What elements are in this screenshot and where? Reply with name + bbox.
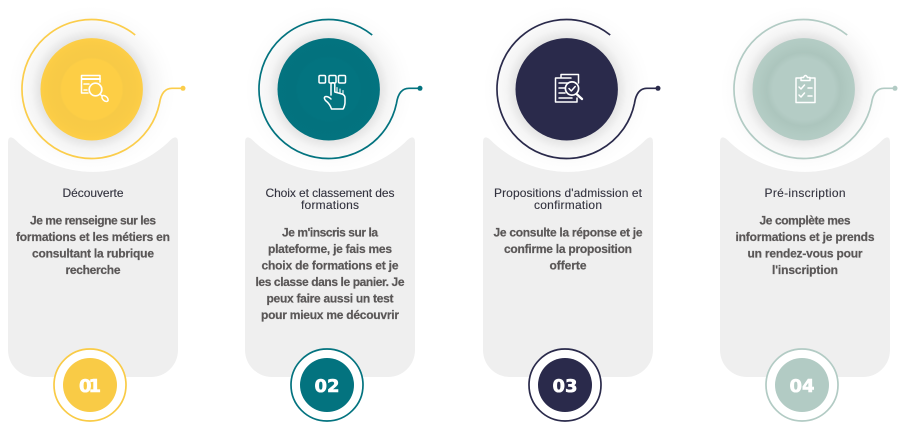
heading: confirmation bbox=[534, 198, 602, 212]
description: informations et je prends bbox=[736, 230, 875, 244]
description: plateforme, je fais mes bbox=[268, 242, 392, 256]
step 1: Découverte bbox=[8, 5, 186, 421]
heading: Propositions d'admission et bbox=[494, 186, 643, 200]
description: Je me renseigne sur les bbox=[30, 214, 156, 228]
description: Je complète mes bbox=[760, 214, 851, 228]
panel: step 4 card bbox=[720, 137, 890, 377]
ring with connector bbox=[22, 20, 186, 159]
description: Je m'inscris sur la bbox=[282, 226, 378, 240]
number badge bbox=[291, 349, 363, 421]
heading: Découverte bbox=[62, 186, 124, 200]
description: recherche bbox=[66, 263, 121, 277]
icon: documents with check magnifier bbox=[556, 74, 582, 102]
description: peux faire aussi un test bbox=[266, 292, 394, 306]
main circle bbox=[40, 38, 143, 140]
description bbox=[494, 226, 643, 272]
number badge: 01 bbox=[79, 376, 101, 397]
main circle bbox=[278, 38, 380, 140]
icon: clipboard checklist bbox=[796, 76, 815, 102]
step 2: Choix et classement bbox=[245, 5, 422, 421]
description bbox=[16, 214, 170, 277]
description: offerte bbox=[550, 258, 587, 272]
heading bbox=[266, 186, 394, 212]
description: choix de formations et je bbox=[262, 258, 399, 272]
icon: hand selecting squares bbox=[319, 76, 346, 109]
description: Je consulte la réponse et je bbox=[494, 226, 643, 240]
step 3: Propositions d'admission bbox=[483, 5, 660, 421]
number badge: 02 bbox=[314, 376, 340, 397]
heading: Pré-inscription bbox=[764, 186, 846, 200]
ring with connector bbox=[497, 20, 660, 159]
description: les classe dans le panier. Je bbox=[256, 275, 405, 289]
description: pour mieux me découvrir bbox=[261, 308, 399, 322]
heading bbox=[494, 186, 643, 212]
circle shadow bbox=[483, 5, 651, 173]
description bbox=[256, 226, 405, 322]
description: un rendez-vous pour bbox=[748, 246, 863, 260]
circle shadow bbox=[245, 5, 413, 173]
description: l'inscription bbox=[772, 263, 838, 277]
circle shadow bbox=[8, 5, 176, 173]
circle shadow bbox=[720, 5, 888, 173]
number badge bbox=[766, 349, 838, 421]
number badge: 03 bbox=[552, 376, 578, 397]
description: formations et les métiers en bbox=[16, 230, 170, 244]
description: consultant la rubrique bbox=[32, 246, 154, 260]
number badge bbox=[54, 349, 126, 421]
main circle bbox=[516, 38, 618, 140]
description: confirme la proposition bbox=[504, 242, 632, 256]
panel: step 3 card bbox=[483, 137, 653, 377]
main circle bbox=[752, 38, 855, 140]
ring with connector bbox=[734, 20, 898, 159]
number badge bbox=[529, 349, 601, 421]
ring with connector bbox=[259, 20, 422, 159]
icon: window with magnifier bbox=[82, 76, 109, 103]
panel: step 2 card bbox=[245, 137, 415, 377]
step 4: Pré-inscription bbox=[720, 5, 898, 421]
description bbox=[736, 214, 875, 277]
panel: step 1 card bbox=[8, 137, 178, 377]
heading: Choix et classement des bbox=[266, 186, 394, 200]
number badge: 04 bbox=[790, 376, 814, 397]
heading: formations bbox=[301, 198, 359, 212]
